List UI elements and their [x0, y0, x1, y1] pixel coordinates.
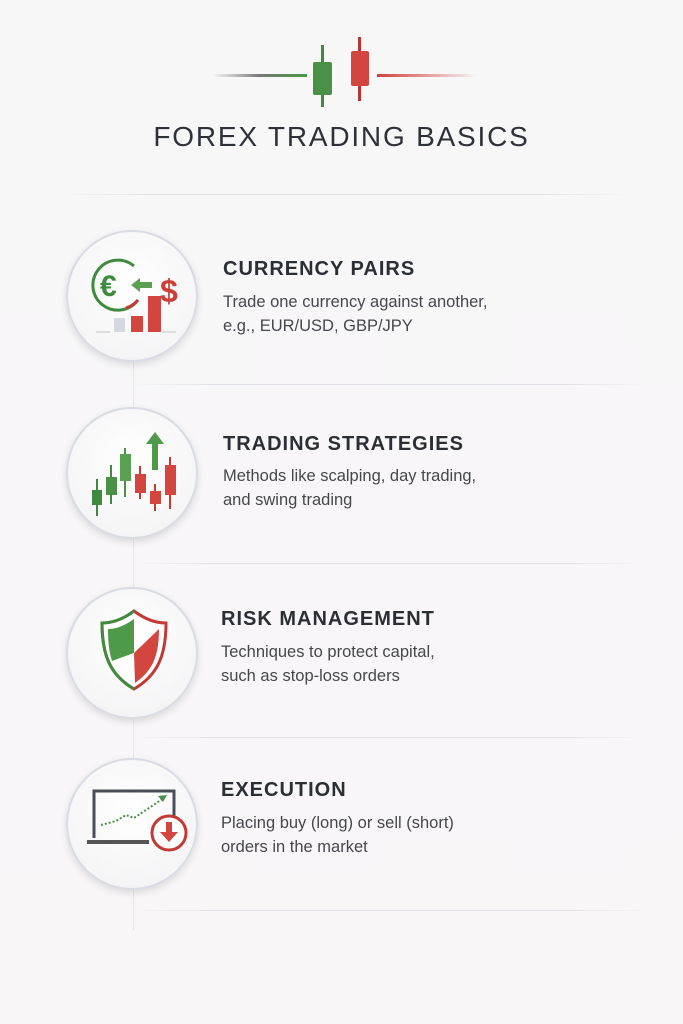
icon: candlesticks	[66, 407, 198, 539]
heading: TRADING STRATEGIES	[223, 433, 464, 455]
text	[221, 814, 454, 856]
icon: euro dollar: $	[160, 273, 178, 309]
item: trading strategies	[64, 407, 476, 544]
heading: RISK MANAGEMENT	[221, 608, 435, 630]
text: and swing trading	[223, 491, 352, 509]
vertical connector	[133, 340, 134, 930]
text	[223, 293, 487, 335]
heading: EXECUTION	[221, 779, 347, 801]
icon: laptop	[66, 758, 198, 890]
text	[221, 643, 435, 685]
item: execution	[64, 758, 454, 895]
title: FOREX TRADING BASICS	[153, 121, 530, 152]
item: currency pairs	[64, 230, 487, 367]
icon: euro dollar: €	[100, 270, 117, 303]
item: risk management	[64, 587, 435, 724]
icon: euro dollar	[66, 230, 198, 362]
header candles icon	[216, 37, 472, 107]
text: Placing buy (long) or sell (short)	[221, 814, 454, 832]
text: e.g., EUR/USD, GBP/JPY	[223, 317, 413, 335]
text: orders in the market	[221, 838, 368, 856]
text: such as stop-loss orders	[221, 667, 400, 685]
text: Methods like scalping, day trading,	[223, 467, 476, 485]
text: Trade one currency against another,	[223, 293, 487, 311]
text: Techniques to protect capital,	[221, 643, 435, 661]
heading: CURRENCY PAIRS	[223, 258, 415, 280]
text	[223, 467, 476, 509]
icon: shield	[66, 587, 198, 719]
